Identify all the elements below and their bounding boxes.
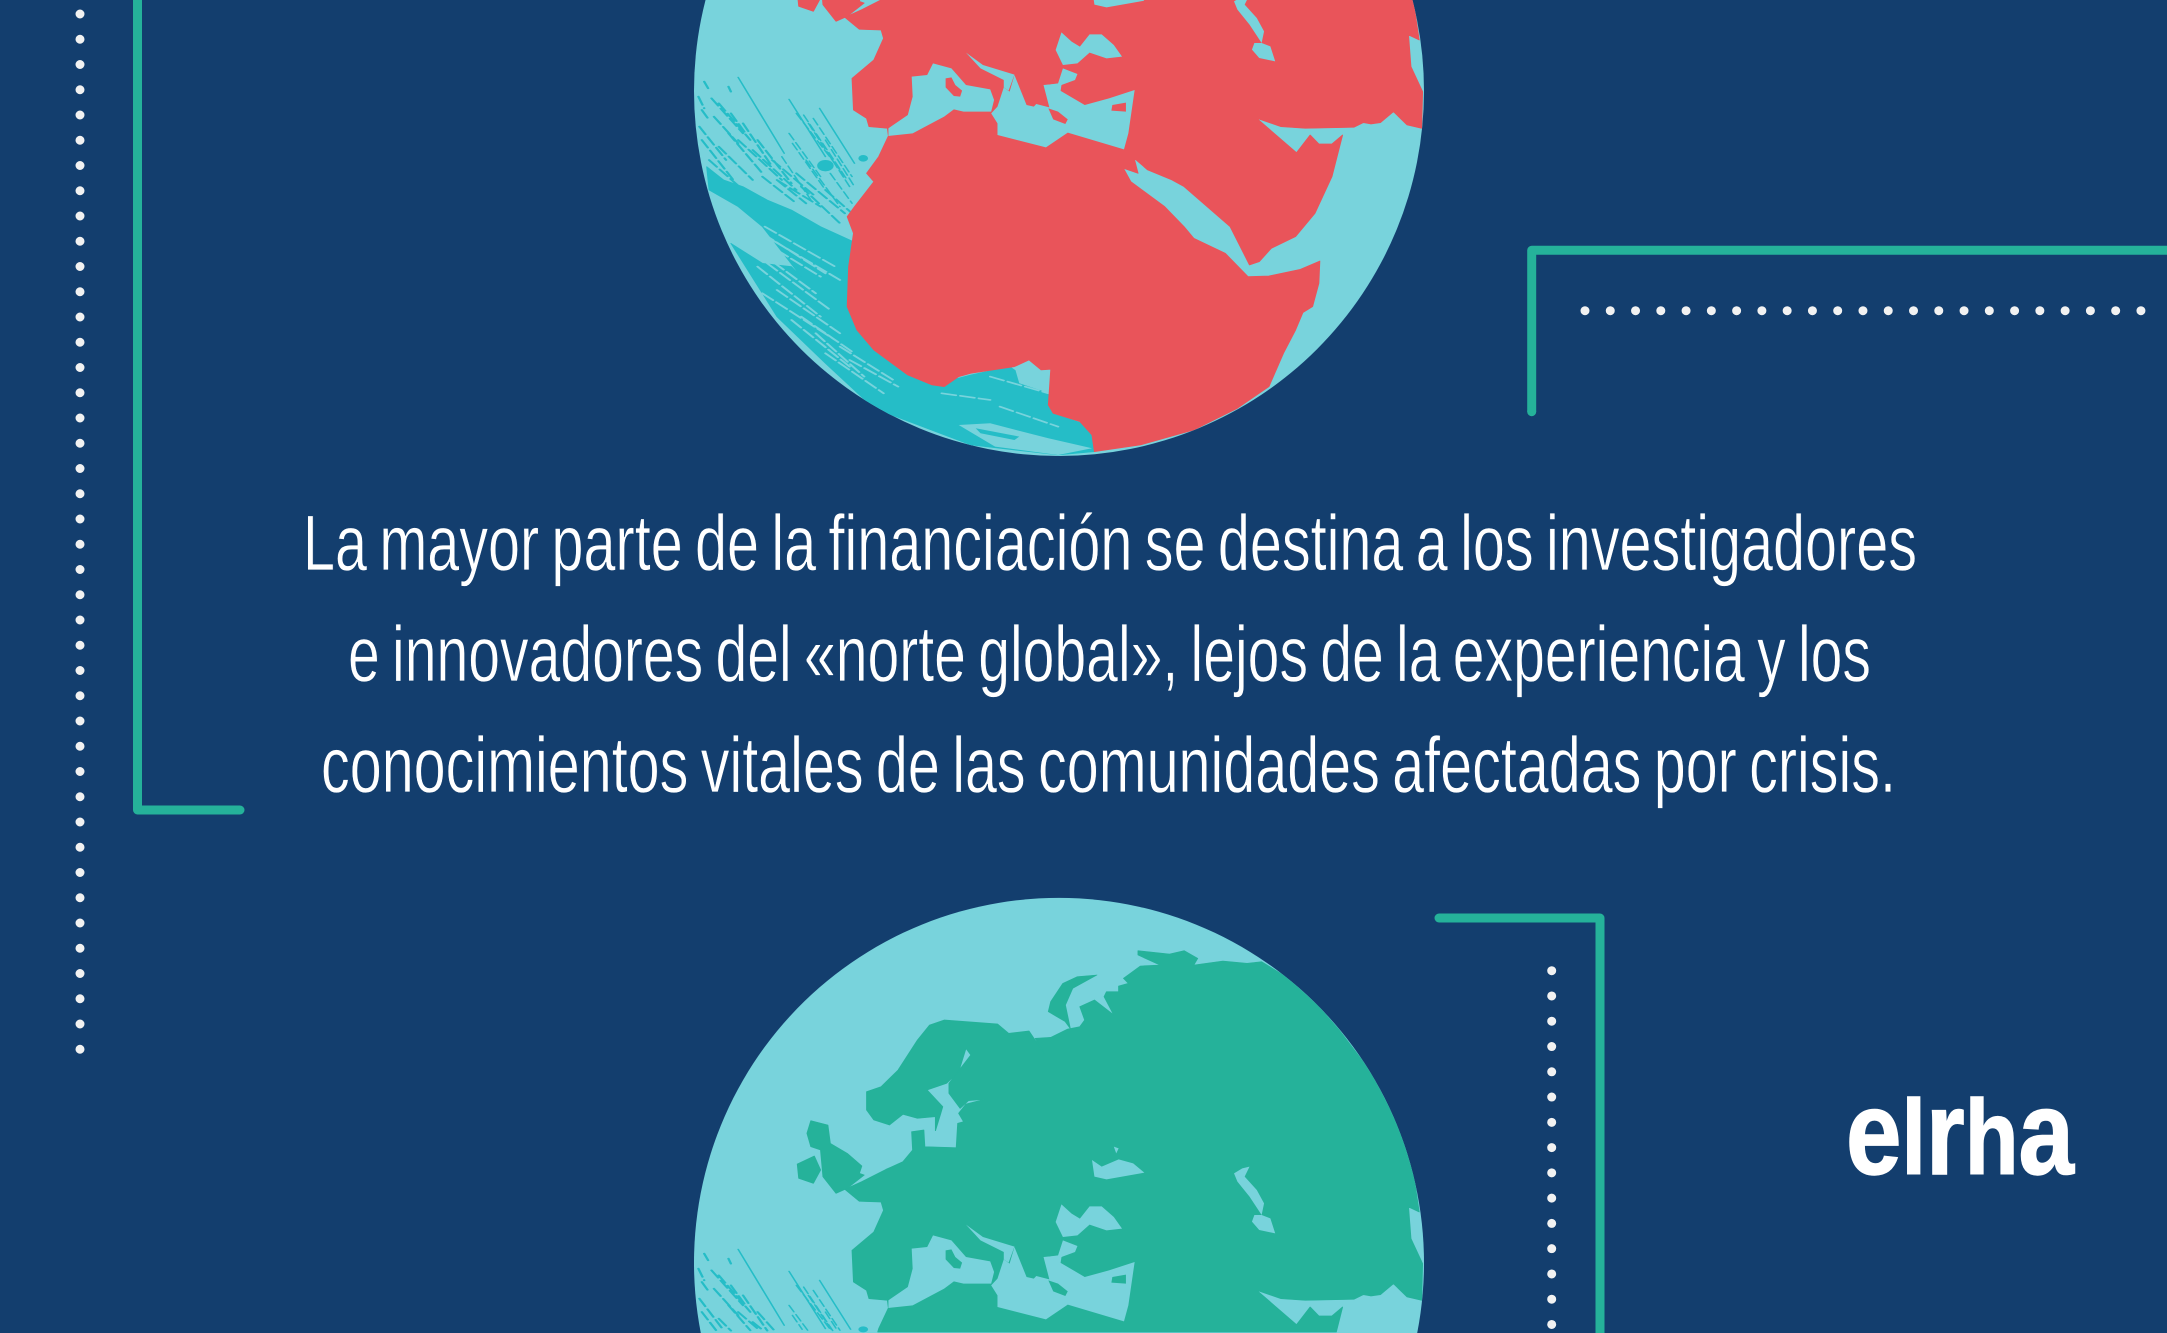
dotted line: bottom right	[1547, 971, 1556, 1325]
main statement text	[303, 498, 1917, 809]
globe: green land	[694, 898, 1424, 1333]
dotted line: top right	[1585, 306, 2162, 315]
green bracket: left	[138, 0, 244, 814]
dotted line: left	[76, 14, 84, 1050]
globe: red land	[694, 0, 1424, 456]
logo: elrha: elrha	[1846, 1066, 2075, 1200]
green bracket: bottom right	[1434, 914, 1600, 1333]
green bracket: top right	[1527, 250, 2167, 416]
